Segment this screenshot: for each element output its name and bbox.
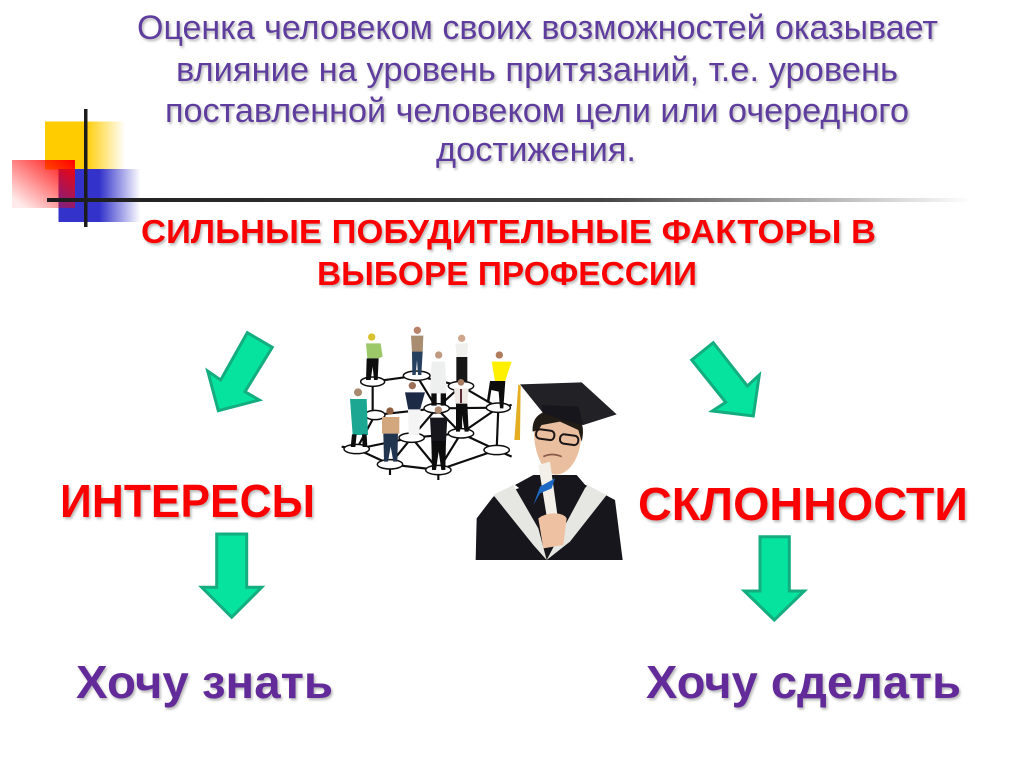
man in black suit — [430, 406, 447, 470]
medic in teal gown — [350, 388, 368, 447]
title: достижения. — [436, 131, 636, 169]
arrow: down-left — [208, 333, 272, 411]
illustration: professions network and graduate — [342, 327, 623, 560]
heading: strong motivating factors: ВЫБОРЕ ПРОФЕССИИ — [317, 255, 697, 292]
decorative corner squares and lines — [12, 109, 972, 227]
worker in yellow helmet — [366, 333, 383, 380]
text: want to know: Хочу знать — [76, 656, 333, 708]
title: Оценка человеком своих возможностей оказывает — [137, 9, 938, 47]
arrow: down under inclinations — [744, 537, 804, 620]
text: want to do: Хочу сделать — [646, 656, 961, 708]
person in white coat — [455, 335, 468, 382]
man in striped shirt — [411, 327, 423, 375]
doctor in white — [430, 351, 447, 406]
arrow: down under interests — [202, 534, 262, 617]
heading: strong motivating factors: СИЛЬНЫЕ ПОБУДИТЕЛЬНЫЕ ФАКТОРЫ В — [141, 213, 876, 250]
title — [137, 9, 938, 169]
network of people — [342, 327, 512, 480]
label: inclinations: СКЛОННОСТИ — [638, 478, 968, 530]
man in yellow shirt — [487, 351, 512, 408]
graduate — [476, 382, 623, 560]
label: interests: ИНТЕРЕСЫ — [60, 475, 315, 527]
man in tie — [454, 379, 469, 432]
title: влияние на уровень притязаний, т.е. уровень — [176, 51, 898, 89]
title: поставленной человеком цели или очередного — [165, 92, 909, 130]
arrow: down-right — [692, 343, 759, 416]
man in dark top — [405, 382, 425, 435]
man with box — [382, 407, 399, 462]
heading: strong motivating factors — [141, 213, 876, 292]
